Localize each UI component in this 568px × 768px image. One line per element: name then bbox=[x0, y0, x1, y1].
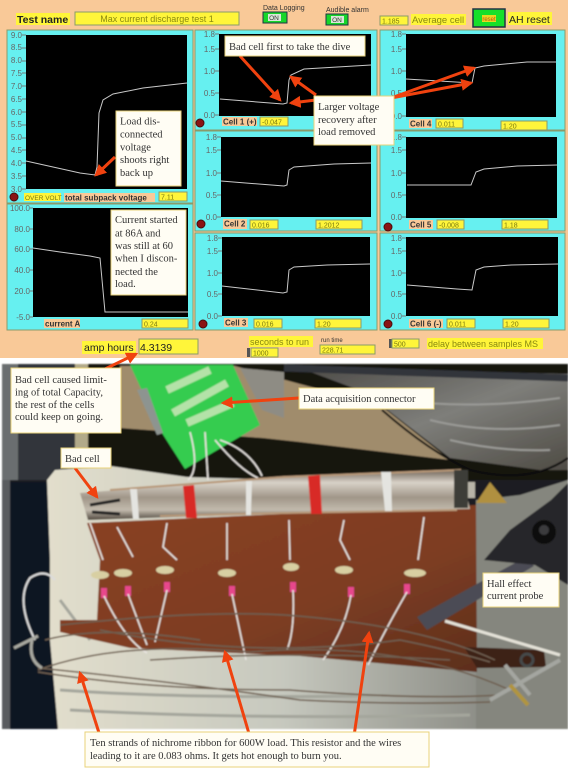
data logging toggle: Data Logging bbox=[263, 5, 305, 12]
cell 6 axis labels: 0.5 bbox=[391, 290, 403, 299]
seconds to run control: 1000 bbox=[253, 350, 269, 358]
cell 4 axis labels bbox=[391, 30, 406, 121]
cell 3 axis labels: 0.0 bbox=[207, 312, 219, 321]
cell 4 field bbox=[436, 119, 463, 128]
cell 4 axis labels: 1.5 bbox=[391, 45, 403, 54]
plot area bbox=[26, 35, 187, 189]
cell 2 axis labels: 1.8 bbox=[206, 133, 218, 142]
voltage axis labels: 7.0 bbox=[11, 82, 23, 91]
battery tube bbox=[80, 470, 470, 520]
cell 6 axis labels: 1.0 bbox=[391, 269, 403, 278]
cell 5 second field bbox=[502, 220, 548, 230]
brown board bbox=[60, 505, 477, 672]
cell 5 axis labels bbox=[391, 133, 406, 222]
callout: larger voltage recovery bbox=[314, 96, 394, 145]
hall effect probe bbox=[417, 483, 568, 655]
current trace bbox=[33, 248, 188, 312]
plot area bbox=[406, 237, 558, 316]
panel: cell 1 bbox=[195, 30, 377, 130]
load wires bbox=[104, 590, 407, 665]
cell 6 axis labels: 1.5 bbox=[391, 247, 403, 256]
callout: limiting capacity: the rest of the cells bbox=[15, 400, 94, 411]
cell tap wires bbox=[90, 517, 424, 560]
cell 4 label: Cell 4 bbox=[410, 120, 432, 128]
test name label: Test name bbox=[17, 14, 68, 26]
cell 5 axis labels: 0.5 bbox=[391, 191, 403, 200]
AH reset button bbox=[473, 9, 552, 27]
voltage axis labels: 7.5 bbox=[11, 69, 23, 78]
current axis labels: 40.0 bbox=[14, 266, 31, 275]
plot area bbox=[33, 208, 188, 317]
plot area bbox=[406, 137, 557, 218]
voltage axis labels: 6.5 bbox=[11, 95, 23, 104]
callout: larger voltage recovery: Larger voltage bbox=[318, 102, 380, 113]
cell 2 axis labels: 0.0 bbox=[206, 213, 218, 222]
nichrome ribbon strands bbox=[38, 614, 510, 703]
voltage axis labels bbox=[11, 31, 26, 194]
cell 6 field bbox=[447, 319, 475, 328]
cell 3 axis labels: 0.5 bbox=[207, 290, 219, 299]
pale wood board bbox=[47, 466, 476, 729]
cell 2 field: 0.016 bbox=[252, 222, 270, 230]
current axis labels: 60.0 bbox=[14, 245, 31, 254]
AH reset button: reset bbox=[482, 17, 496, 23]
cell 1 axis labels: 1.0 bbox=[204, 67, 216, 76]
cell 3 axis labels: 1.0 bbox=[207, 269, 219, 278]
cell 5 field bbox=[437, 220, 464, 230]
callout: bad cell first: Bad cell first to take the dive bbox=[229, 42, 351, 53]
plot area bbox=[222, 237, 370, 316]
cell 6 field: 0.011 bbox=[449, 322, 466, 328]
cell 1 axis labels: 0.0 bbox=[204, 111, 216, 120]
callout: limiting capacity: could keep on going. bbox=[15, 412, 103, 423]
cell 6 label: Cell 6 (-) bbox=[410, 320, 442, 328]
callout: hall effect probe: Hall effect bbox=[487, 579, 531, 590]
cell 4 axis labels: 0.0 bbox=[391, 112, 403, 121]
cell 1 axis labels: 1.5 bbox=[204, 45, 216, 54]
white lead loop bbox=[24, 573, 55, 640]
callout: nichrome ribbon bbox=[85, 732, 429, 767]
header controls bbox=[16, 4, 552, 27]
battery bands bbox=[90, 470, 507, 519]
over volt indicator bbox=[10, 193, 18, 201]
cell 3 axis labels bbox=[207, 234, 222, 321]
callout: current: at 86A and bbox=[115, 228, 161, 240]
cell 2 indicator bbox=[197, 220, 205, 228]
cell 6 axis labels bbox=[391, 234, 406, 321]
voltage axis labels: 9.0 bbox=[11, 31, 23, 40]
plot area bbox=[406, 34, 556, 117]
cell 4 axis labels: 1.0 bbox=[391, 67, 403, 76]
arrow: data acquisition bbox=[223, 398, 299, 403]
arrow: nichrome middle bbox=[225, 652, 250, 737]
seconds to run control bbox=[247, 336, 313, 358]
test name field: Max current discharge test 1 bbox=[100, 14, 214, 24]
callout: load disconnected bbox=[116, 111, 181, 186]
photo: battery pack test rig bbox=[2, 364, 568, 729]
cell 1 axis labels bbox=[204, 30, 219, 120]
callout: data acquisition connector bbox=[299, 388, 434, 409]
callout: load disconnected: voltage bbox=[120, 142, 151, 154]
cell 4 second field bbox=[501, 121, 547, 130]
gray wood at right bbox=[476, 480, 568, 729]
current axis labels: 80.0 bbox=[14, 225, 31, 234]
cell 2 axis labels: 1.0 bbox=[206, 169, 218, 178]
green circuit board bbox=[130, 365, 260, 469]
cell 2 axis labels: 0.5 bbox=[206, 191, 218, 200]
cell 5 field: -0.008 bbox=[439, 222, 459, 230]
cell 5 label: Cell 5 bbox=[410, 220, 432, 230]
callout: larger voltage recovery: recovery after bbox=[318, 115, 377, 126]
amp hours readout bbox=[82, 339, 198, 354]
plot area bbox=[221, 137, 371, 217]
voltage trace bbox=[26, 83, 187, 175]
cell 5 indicator bbox=[384, 223, 392, 231]
average cell readout: Average cell bbox=[412, 15, 464, 26]
current axis labels bbox=[10, 204, 33, 322]
AH reset button: AH reset bbox=[509, 14, 550, 26]
cell 2 second field bbox=[316, 220, 362, 230]
plot area bbox=[219, 34, 371, 116]
subpack voltage field: 7.11 bbox=[161, 194, 174, 202]
callout: bad cell bbox=[61, 448, 111, 468]
panel: total subpack voltage bbox=[7, 30, 193, 203]
cell 3 axis labels: 1.8 bbox=[207, 234, 219, 243]
cell 2 trace bbox=[221, 163, 371, 186]
control panel background bbox=[0, 0, 568, 358]
average cell readout bbox=[380, 14, 466, 26]
cell 1 field: -0.047 bbox=[262, 120, 282, 126]
cell 5 second field: 1.18 bbox=[504, 222, 518, 230]
cell 3 trace bbox=[222, 264, 370, 293]
cell 2 axis labels: 1.5 bbox=[206, 146, 218, 155]
callout: limiting capacity bbox=[11, 368, 121, 433]
callout: current: load. bbox=[115, 279, 136, 290]
panel: cell 5 bbox=[380, 131, 565, 231]
panel: current A bbox=[7, 204, 193, 330]
callout: limiting capacity: Bad cell caused limit- bbox=[15, 375, 107, 386]
cell 4 second field: 1.20 bbox=[503, 124, 517, 130]
cell 2 axis labels bbox=[206, 133, 221, 222]
cell 1 trace bbox=[220, 65, 371, 104]
callout: load disconnected: Load dis- bbox=[120, 116, 160, 128]
voltage axis labels: 4.0 bbox=[11, 159, 23, 168]
cell 6 axis labels: 1.8 bbox=[391, 234, 403, 243]
voltage axis labels: 8.5 bbox=[11, 43, 23, 52]
cell 3 label: Cell 3 bbox=[225, 318, 247, 328]
cell 4 trace bbox=[406, 62, 556, 83]
voltage axis labels: 3.5 bbox=[11, 172, 23, 181]
over volt label: OVER VOLT bbox=[25, 195, 62, 202]
cell 3 second field bbox=[315, 319, 361, 328]
cell 5 axis labels: 0.0 bbox=[391, 213, 403, 222]
amp hours readout: amp hours bbox=[84, 342, 134, 354]
delay control: 500 bbox=[394, 342, 406, 348]
pink crimp connectors bbox=[101, 582, 410, 598]
cell 6 second field: 1.20 bbox=[505, 322, 519, 328]
voltage axis labels: 4.5 bbox=[11, 146, 23, 155]
left bolt bbox=[14, 636, 42, 668]
cell 2 field bbox=[250, 220, 278, 230]
arrow: bad cell bbox=[75, 468, 97, 497]
left dark case bbox=[2, 480, 56, 729]
audible alarm toggle bbox=[326, 7, 369, 25]
cell 4 axis labels: 0.5 bbox=[391, 89, 403, 98]
callout: bad cell: Bad cell bbox=[65, 454, 100, 465]
callout: hall effect probe: current probe bbox=[487, 591, 544, 602]
arrow: nichrome right bbox=[354, 633, 369, 736]
cell 3 field bbox=[254, 319, 282, 328]
cell 1 axis labels: 0.5 bbox=[204, 89, 216, 98]
cell 5 trace bbox=[407, 165, 557, 185]
current field bbox=[142, 319, 188, 328]
upper wood planks bbox=[2, 364, 568, 480]
callout: larger voltage recovery: load removed bbox=[318, 127, 376, 138]
arrow: amp hours bbox=[105, 354, 136, 369]
data logging toggle bbox=[263, 4, 305, 23]
panel: cell 4 bbox=[380, 30, 565, 130]
callout: bad cell first bbox=[225, 36, 365, 56]
audible alarm toggle: Audible alarm bbox=[326, 7, 369, 14]
voltage axis labels: 3.0 bbox=[11, 185, 23, 194]
current field: 0.24 bbox=[144, 322, 158, 328]
callout: current bbox=[111, 210, 186, 295]
arrow: load disconnected bbox=[96, 157, 115, 175]
cell 6 second field bbox=[503, 319, 549, 328]
delay control: delay between samples MS bbox=[428, 339, 538, 349]
cell 6 axis labels: 0.0 bbox=[391, 312, 403, 321]
run time readout bbox=[320, 336, 375, 354]
average cell readout: 1.185 bbox=[382, 18, 400, 26]
panel: cell 6 bbox=[380, 233, 565, 330]
amp hours readout: 4.3139 bbox=[140, 342, 172, 354]
test name field bbox=[75, 12, 239, 25]
cell 1 label: Cell 1 (+) bbox=[223, 118, 257, 126]
cell 1 field bbox=[260, 117, 288, 126]
cell 5 axis labels: 1.5 bbox=[391, 146, 403, 155]
cell 1 axis labels: 1.8 bbox=[204, 30, 216, 39]
run time readout: run time bbox=[321, 338, 343, 344]
callout: current: Current started bbox=[115, 215, 178, 226]
cell 3 indicator bbox=[199, 320, 207, 328]
run time readout: 228.71 bbox=[322, 348, 344, 354]
voltage axis labels: 5.5 bbox=[11, 120, 23, 129]
cell 2 second field: 1.2012 bbox=[318, 222, 340, 230]
seconds to run control: seconds to run bbox=[250, 337, 309, 347]
terminal wing nuts bbox=[91, 563, 426, 579]
current label: current A bbox=[45, 320, 80, 328]
bottom controls bbox=[82, 336, 543, 358]
current axis labels: -5.0 bbox=[16, 313, 31, 322]
callout: nichrome ribbon: leading to it are 0.083 ohms. It gets hot enough to burn you. bbox=[90, 751, 342, 762]
voltage axis labels: 6.0 bbox=[11, 108, 23, 117]
board tab behind bolt bbox=[464, 647, 546, 668]
cell 4 field: 0.011 bbox=[438, 122, 455, 128]
cell 4 axis labels: 1.8 bbox=[391, 30, 403, 39]
cell 5 axis labels: 1.0 bbox=[391, 169, 403, 178]
subpack voltage field bbox=[159, 192, 187, 202]
audible alarm toggle: ON bbox=[332, 17, 342, 24]
callout: data acquisition connector: Data acquisition connector bbox=[303, 394, 416, 405]
data logging toggle: ON bbox=[269, 15, 279, 22]
delay control bbox=[389, 338, 543, 349]
arrow: nichrome left bbox=[80, 673, 100, 736]
callout: load disconnected: back up bbox=[120, 168, 153, 179]
cell 2 label: Cell 2 bbox=[224, 220, 246, 228]
cell 1 indicator bbox=[196, 119, 204, 127]
cell 6 trace bbox=[407, 264, 558, 290]
callout: load disconnected: connected bbox=[120, 130, 163, 140]
arrows: larger voltage recovery bbox=[291, 68, 474, 103]
current axis labels: 100.0 bbox=[10, 204, 31, 213]
cell 3 axis labels: 1.5 bbox=[207, 247, 219, 256]
cell 3 field: 0.016 bbox=[256, 322, 274, 328]
callout: nichrome ribbon: Ten strands of nichrome ribbon for 600W load. This resistor and the wires bbox=[90, 738, 401, 749]
callout: hall effect probe bbox=[483, 573, 559, 607]
voltage axis labels: 5.0 bbox=[11, 133, 23, 142]
voltage axis labels: 8.0 bbox=[11, 56, 23, 65]
arrow: bad cell dive bbox=[240, 56, 280, 100]
callout: load disconnected: shoots right bbox=[120, 155, 169, 166]
cell 6 indicator bbox=[384, 320, 392, 328]
sense wires to connector bbox=[188, 432, 262, 480]
cell 3 second field: 1.20 bbox=[317, 322, 331, 328]
subpack voltage label: total subpack voltage bbox=[65, 194, 147, 202]
right bolt assembly bbox=[490, 654, 560, 705]
callout: current: when I discon- bbox=[115, 254, 178, 264]
callout: limiting capacity: ing of total Capacity, bbox=[15, 388, 103, 398]
current axis labels: 20.0 bbox=[14, 287, 31, 296]
cell 5 axis labels: 1.8 bbox=[391, 133, 403, 142]
panel: cell 3 bbox=[195, 233, 377, 330]
callout: current: nected the bbox=[115, 267, 158, 278]
callout: current: was still at 60 bbox=[115, 241, 173, 252]
panel: cell 2 bbox=[195, 131, 377, 231]
